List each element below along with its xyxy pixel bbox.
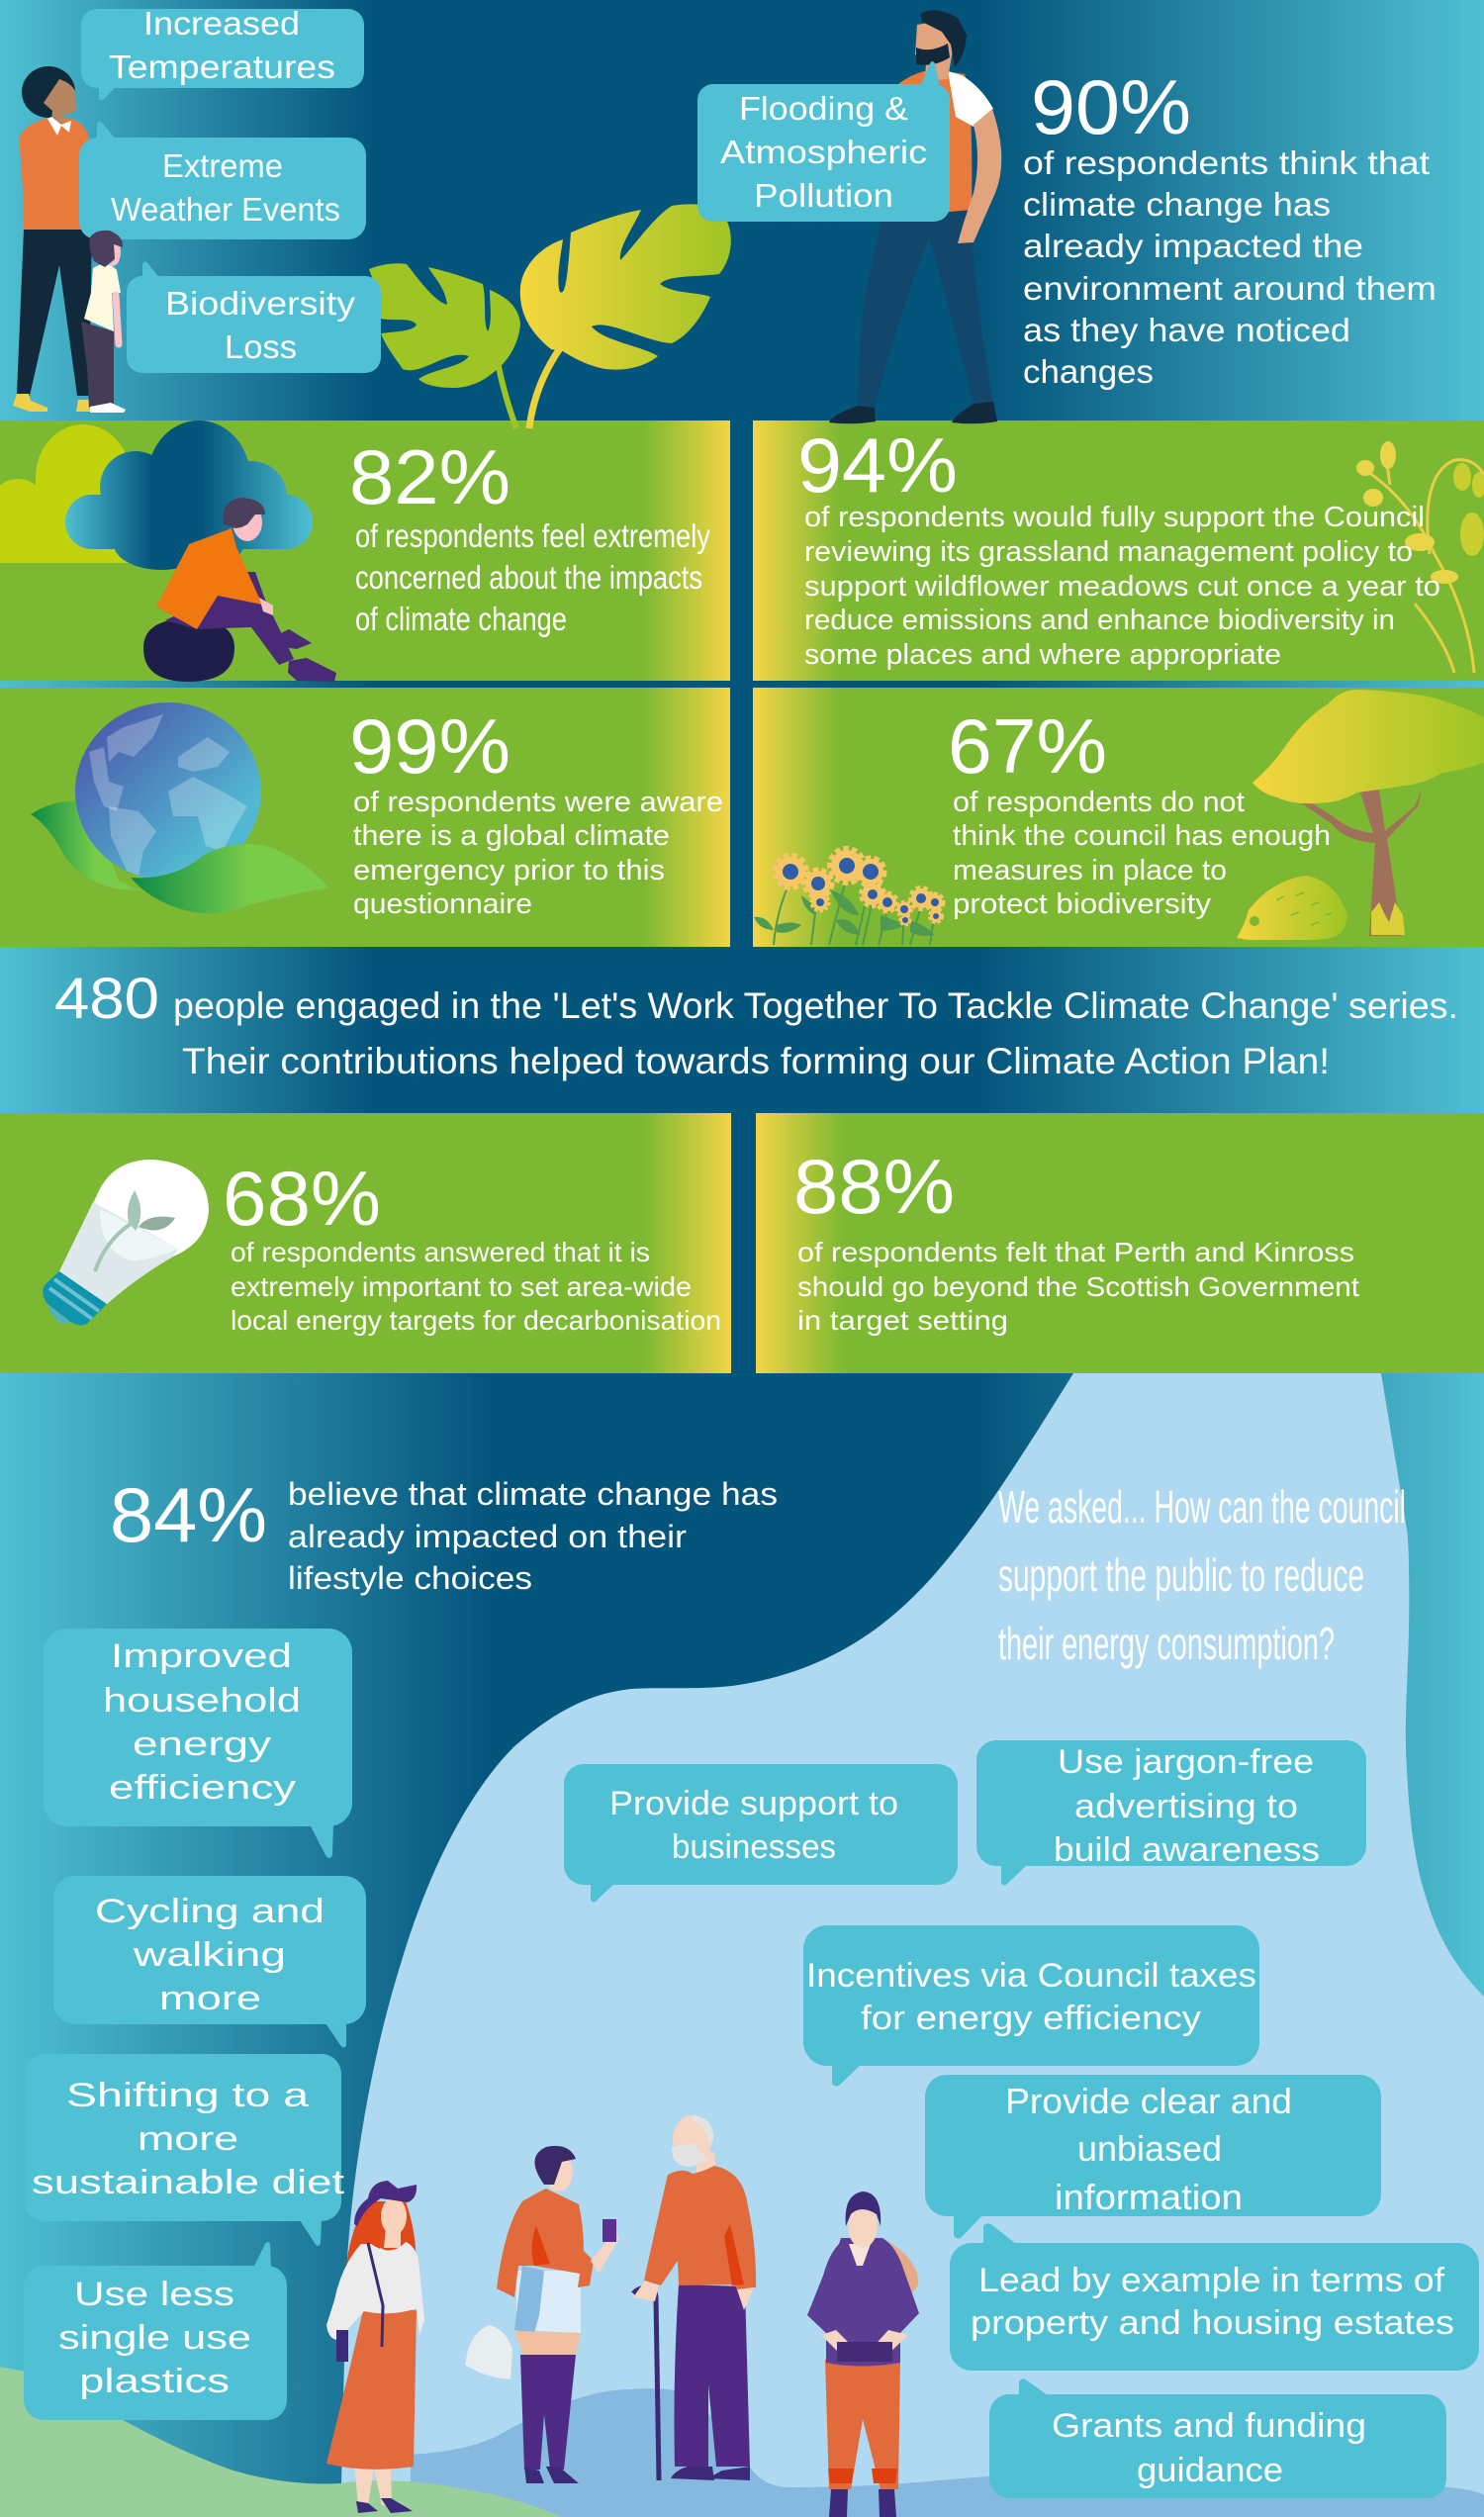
speech bubble: Improved household energy efficiency: efficiency [109, 1769, 296, 1807]
illustration: woman standing [13, 66, 92, 412]
speech bubble: Grants and funding guidance: Grants and funding [1052, 2407, 1366, 2445]
speech bubble: Provide clear and unbiased information: Provide clear and [1005, 2081, 1292, 2121]
stat: 82 percent: of respondents feel extremely [355, 517, 710, 554]
speech bubble: Provide support to businesses: businesses [672, 1828, 836, 1866]
stat: 94 percent: reduce emissions and enhance biodiversity in [804, 605, 1395, 636]
engagement statement: Their contributions helped towards forming our Climate Action Plan! [182, 1041, 1330, 1081]
stat: 99 percent: there is a global climate [353, 820, 670, 852]
speech bubble: Incentives via Council taxes [803, 1925, 1259, 2086]
icon: squirrel [1371, 902, 1405, 935]
speech bubble: Provide clear and unbiased information [925, 2075, 1381, 2238]
engagement statement: people engaged in the 'Let's Work Together To Tackle Climate Change' series. [173, 985, 1458, 1026]
stat: 90 percent: as they have noticed [1023, 312, 1350, 348]
panel: 67 percent background [753, 688, 1484, 947]
speech bubble: Incentives via Council taxes: Incentives via Council taxes [806, 1957, 1256, 1995]
stat: 82 percent [349, 433, 710, 637]
stat: 94 percent: some places and where appropriate [804, 639, 1281, 671]
speech bubble: Biodiversity Loss: Biodiversity [165, 285, 356, 322]
stat: 88 percent: 88% [793, 1143, 955, 1230]
speech bubble: Extreme Weather Events: Extreme [162, 147, 283, 184]
panel: 99 percent background [0, 688, 730, 947]
illustration: sunflowers [754, 850, 943, 945]
speech bubble: Lead by example: Lead by example in terms of [978, 2262, 1445, 2299]
speech bubble: Shifting to a more sustainable diet: Shifting to a [66, 2077, 309, 2114]
stat: 68 percent: 68% [223, 1155, 381, 1242]
stat: 68 percent [223, 1155, 721, 1336]
stat: 99 percent: of respondents were aware [353, 787, 723, 818]
stat: 94 percent [797, 421, 1440, 671]
speech bubble: Use jargon-free advertising to build awareness: advertising to [1074, 1788, 1298, 1825]
speech bubble: Cycling and walking more: walking [133, 1936, 286, 1974]
stat: 82 percent: concerned about the impacts [355, 559, 702, 596]
engagement statement [54, 967, 1458, 1081]
stat: 84 percent [110, 1471, 778, 1596]
stat: 67 percent: 67% [948, 702, 1107, 790]
green hill [0, 2367, 562, 2517]
speech bubble: Improved household energy efficiency: energy [133, 1725, 271, 1763]
stat: 88 percent: of respondents felt that Perth and Kinross [797, 1237, 1354, 1267]
stat: 94 percent: reviewing its grassland management policy to [804, 536, 1413, 568]
stat: 90 percent [1023, 63, 1437, 390]
stat: 67 percent: measures in place to [953, 855, 1227, 886]
illustration: standing boy [807, 2191, 919, 2517]
stat: 90 percent: 90% [1031, 63, 1191, 150]
stat: 90 percent: already impacted the [1023, 228, 1363, 264]
stat: 94 percent: support wildflower meadows cut once a year to [804, 571, 1440, 603]
icon: tree trunk [1299, 790, 1422, 936]
icon: large yellow leaf [520, 204, 731, 428]
speech bubble: Cycling and walking more: more [159, 1980, 261, 2017]
speech bubble: Cycling and walking more: Cycling and [95, 1893, 325, 1930]
stat: 99 percent: questionnaire [353, 888, 532, 920]
stat: 90 percent: of respondents think that [1023, 144, 1430, 181]
engagement statement: 480 [54, 967, 159, 1031]
stat: 84 percent: lifestyle choices [288, 1560, 532, 1596]
stat: 94 percent: of respondents would fully support the Council [804, 502, 1425, 533]
speech bubble: Improved household energy efficiency: household [103, 1682, 301, 1720]
stat: 68 percent: of respondents answered that it is [231, 1237, 650, 1267]
speech bubble: Provide support to businesses [564, 1764, 958, 1902]
stat: 67 percent: protect biodiversity [953, 888, 1212, 920]
speech bubble: Shifting to a more sustainable diet: more [138, 2120, 238, 2158]
speech bubble: Use jargon-free advertising to build awareness: Use jargon-free [1058, 1743, 1314, 1781]
speech bubble: Use jargon-free advertising to build awareness [976, 1740, 1366, 1886]
speech bubble: Cycling and walking more [53, 1876, 366, 2048]
speech bubble: Lead by example [950, 2223, 1479, 2371]
speech bubble: Use less single use plastics: Use less [74, 2276, 234, 2313]
panel: 94 percent background [753, 420, 1484, 681]
icon: sitting person [156, 498, 336, 682]
speech bubble: Shifting to a more sustainable diet [25, 2054, 345, 2246]
speech bubble: Shifting to a more sustainable diet: sustainable diet [32, 2164, 345, 2201]
stat: 67 percent [948, 702, 1331, 920]
stat: 68 percent: local energy targets for decarbonisation [231, 1305, 721, 1336]
speech bubble: Improved household energy efficiency: Improved [111, 1637, 292, 1675]
icon: pouf [143, 618, 234, 682]
speech bubble: Biodiversity Loss: Loss [225, 328, 297, 365]
illustration: woman in hat [326, 2181, 424, 2513]
stat: 67 percent: think the council has enough [953, 820, 1331, 852]
light blue background shape [341, 1373, 1484, 2517]
stat: 99 percent: 99% [349, 702, 510, 790]
speech bubble: Use less single use plastics: single use [58, 2319, 251, 2357]
illustration: globe with leaves [31, 702, 328, 913]
speech bubble: Increased Temperatures [81, 5, 364, 101]
panel: 68 percent background [0, 1113, 731, 1373]
speech bubble: Incentives via Council taxes: for energy efficiency [861, 2000, 1201, 2037]
right teal shape [1381, 1373, 1484, 1997]
icon: small green leaf [369, 263, 520, 428]
icon: dark cloud [65, 420, 313, 570]
illustration: clouds and sitting person [0, 420, 336, 682]
speech bubble: Improved household energy efficiency [44, 1629, 352, 1858]
speech bubble: Biodiversity Loss [127, 261, 381, 373]
speech bubble: Lead by example: property and housing estates [971, 2304, 1454, 2342]
illustration: child [81, 231, 126, 413]
stat: 88 percent: in target setting [797, 1305, 1008, 1336]
speech bubble: Flooding and Atmospheric Pollution: Flooding & [739, 90, 908, 127]
illustration: light bulb with leaf [43, 1160, 209, 1325]
stat: 82 percent: 82% [349, 433, 510, 520]
panel: 88 percent background [756, 1113, 1484, 1373]
darker blue hill [411, 2388, 1484, 2517]
stat: 88 percent [793, 1143, 1359, 1336]
stat: 84 percent: believe that climate change has [288, 1476, 778, 1512]
bottom section background [0, 1373, 1484, 2517]
speech bubble: Extreme Weather Events: Weather Events [111, 191, 340, 228]
illustration: wildflowers [1356, 441, 1484, 673]
speech bubble: Flooding and Atmospheric Pollution: Pollution [754, 177, 893, 214]
speech bubble: Use jargon-free advertising to build awareness: build awareness [1054, 1831, 1320, 1869]
stat: 99 percent: emergency prior to this [353, 855, 665, 886]
illustration: woman with phone [465, 2146, 619, 2483]
stat: 82 percent: of climate change [355, 601, 567, 637]
stat: 90 percent: climate change has [1023, 186, 1331, 223]
speech bubble: Extreme Weather Events [79, 122, 366, 239]
speech bubble: Increased Temperatures: Increased [143, 5, 300, 42]
speech bubble: Provide support to businesses: Provide support to [609, 1785, 898, 1822]
speech bubble: Flooding and Atmospheric Pollution [697, 61, 950, 222]
heading: we asked [998, 1481, 1406, 1669]
stat: 90 percent: environment around them [1023, 270, 1437, 307]
stat: 88 percent: should go beyond the Scottish Government [797, 1271, 1359, 1302]
speech bubble: Provide clear and unbiased information: information [1055, 2177, 1243, 2217]
stat: 84 percent: 84% [110, 1471, 267, 1558]
speech bubble: Use less single use plastics [24, 2242, 287, 2420]
illustration: elderly man with cane [633, 2115, 756, 2480]
icon: tree canopy [1252, 690, 1484, 803]
stat: 68 percent: extremely important to set area-wide [231, 1271, 692, 1302]
illustration: tree, hedgehog and squirrel [1237, 690, 1484, 940]
stat: 99 percent [349, 702, 723, 920]
icon: yellow cloud [0, 424, 134, 563]
speech bubble: Grants and funding guidance: guidance [1137, 2452, 1283, 2489]
speech bubble: Grants and funding guidance [989, 2378, 1446, 2498]
panel: 82 percent background [0, 420, 730, 681]
stat: 94 percent: 94% [797, 421, 958, 509]
speech bubble: Use less single use plastics: plastics [79, 2363, 230, 2400]
stat: 67 percent: of respondents do not [953, 787, 1245, 818]
stat: 84 percent: already impacted on their [288, 1519, 687, 1554]
top background band [0, 0, 1484, 1373]
illustration: bearded man [829, 10, 1001, 423]
speech bubble: Provide clear and unbiased information: unbiased [1077, 2128, 1222, 2169]
icon: hedgehog [1237, 876, 1347, 940]
speech bubble: Flooding and Atmospheric Pollution: Atmospheric [720, 134, 927, 170]
speech bubble: Increased Temperatures: Temperatures [109, 48, 335, 85]
stat: 90 percent: changes [1023, 353, 1154, 390]
illustration: monstera leaves [369, 204, 731, 428]
